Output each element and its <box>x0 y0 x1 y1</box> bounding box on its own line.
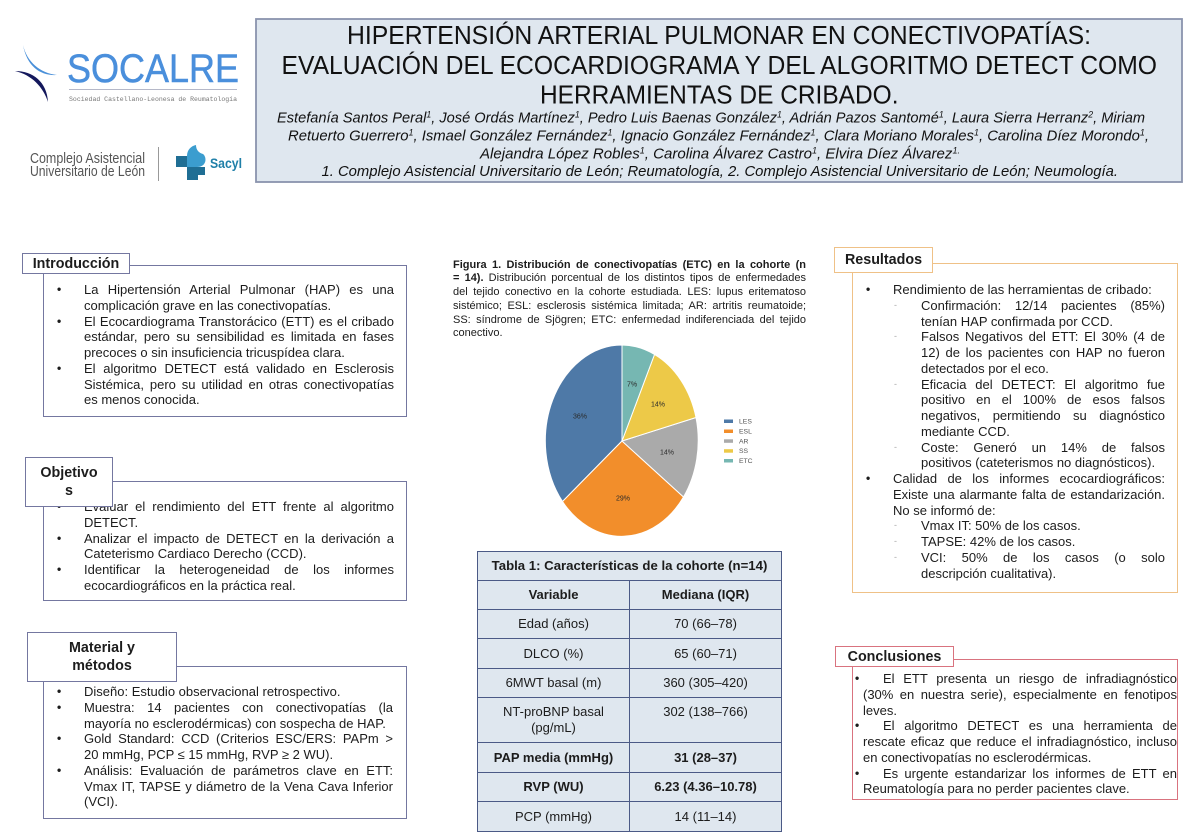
table: características de la cohorte: Mediana (IQR) <box>662 587 749 602</box>
table: características de la cohorte: 360 (305–420) <box>663 675 748 690</box>
table: características de la cohorte: NT-proBNP basal <box>503 704 604 719</box>
pie legend: SS <box>739 448 749 455</box>
logo: SOCALRE: SOCALRE <box>67 47 239 91</box>
heading: Material y métodos <box>27 632 177 682</box>
pie percentage labels: 36% <box>573 414 587 420</box>
text block: métodos bullets: 20 mmHg, PCP ≤ 15 mmHg, RVP ≥ 2 WU). <box>84 747 333 762</box>
panel: material y métodos: • <box>57 684 61 698</box>
pie chart: distribución de conectivopatías <box>546 346 753 536</box>
text block: conclusiones bullets: Es urgente estandarizar los informes de ETT en <box>883 766 1177 780</box>
logo: Complejo Asistencial / Sacyl: Complejo Asistencial <box>30 150 145 167</box>
text block: objetivos bullets: DETECT. <box>84 515 138 530</box>
logo: Complejo Asistencial / Sacyl: Universitario de León <box>30 163 145 180</box>
text block: introducción bullets: es menos conocida. <box>84 392 200 407</box>
text block: métodos bullets: Vmax IT, TAPSE y diámetro de la Vena Cava Inferior <box>84 778 393 794</box>
text block: objetivos bullets <box>57 499 394 593</box>
title banner: 2 <box>1087 109 1093 119</box>
text block: figure 1 caption: conectivo. <box>453 327 503 339</box>
text block: resultados bullets: Confirmación: 12/14 pacientes (85%) <box>921 298 1165 313</box>
panel: conclusiones: • <box>855 718 859 732</box>
panel: resultados: • <box>866 471 870 485</box>
panel: resultados: • <box>866 282 870 296</box>
text block: objetivos bullets: Evaluar el rendimiento del ETT frente al algoritmo <box>84 499 394 514</box>
title banner: 1. <box>952 146 960 156</box>
text block: resultados bullets: mediante CCD. <box>921 424 1010 439</box>
text block: resultados bullets: tenían HAP confirmada por CCD. <box>921 314 1113 328</box>
title banner: 1 <box>607 128 612 138</box>
text block: conclusiones bullets: El ETT presenta un riesgo de infradiagnóstico <box>883 671 1177 686</box>
text block: métodos bullets: mayoría no esclerodérmicas) con sospecha de HAP. <box>84 716 386 730</box>
title banner: 1 <box>409 128 413 138</box>
panel: resultados <box>834 247 1178 593</box>
table: características de la cohorte: Variable <box>529 587 578 602</box>
pie legend: LES <box>739 418 752 426</box>
title banner: , Elvira Díez Álvarez <box>817 146 953 162</box>
text block: métodos bullets: Muestra: 14 pacientes con conectivopatías (la <box>84 700 393 715</box>
text block: resultados bullets: - <box>894 300 897 310</box>
heading: Conclusiones <box>835 646 954 667</box>
title banner: Alejandra López Robles <box>480 146 639 162</box>
table: características de la cohorte: 14 (11–14) <box>675 808 736 824</box>
panel: introducción: • <box>57 314 61 328</box>
pie percentage labels: 7% <box>627 382 637 388</box>
title banner: HERRAMIENTAS DE CRIBADO. <box>540 81 898 109</box>
title banner: Retuerto Guerrero <box>288 128 410 145</box>
table: características de la cohorte: 31 (28–37) <box>674 750 737 764</box>
text block: conclusiones bullets: en conectivopatías no esclerodérmicas. <box>863 750 1091 765</box>
table: características de la cohorte: PAP media (mmHg) <box>494 750 613 764</box>
text block: resultados bullets: positivos (cateterismos no diagnósticos). <box>921 455 1155 470</box>
text block: figure 1 caption: del tejido conectivo en la cohorte estudiada. LES: lupus eritematoso <box>453 286 806 298</box>
text block: métodos bullets: Gold Standard: CCD (Criterios ESC/ERS: PAPm > <box>84 731 393 746</box>
text block: introducción bullets <box>57 282 394 407</box>
panel: conclusiones: • <box>855 766 859 780</box>
text block: resultados bullets <box>866 282 1165 580</box>
logo: SOCALRE: Sociedad Castellano-Leonesa de Reumatología <box>69 96 237 103</box>
panel: introducción: • <box>57 282 61 296</box>
title banner: , Adrián Pazos Santomé <box>782 109 939 126</box>
text block: resultados bullets: detectados por el eco. <box>921 361 1049 376</box>
text block: métodos bullets: Análisis: Evaluación de parámetros clave en ETT: <box>84 763 393 778</box>
title banner: 1. Complejo Asistencial Universitario de León; Reumatología, 2. Complejo Asistencial Universitario de León; Neumología. <box>322 163 1118 180</box>
text block: resultados bullets: No se informó de: <box>893 502 996 518</box>
heading: Introducción <box>22 253 130 274</box>
panel: material y métodos: • <box>57 700 61 714</box>
text block: figure 1 caption: SS: síndrome de Sjögren; ETC: enfermedad indiferenciada del tejido <box>453 314 806 326</box>
panel: introducción <box>22 253 407 417</box>
title banner: 1 <box>939 109 944 119</box>
text block: introducción bullets: Sistémica, pero su utilidad en otras conectivopatías <box>84 376 394 392</box>
pie legend: ESL <box>739 428 752 436</box>
text block: conclusiones bullets <box>855 671 1177 796</box>
panel: objetivos <box>25 457 407 601</box>
heading: Conclusiones: Conclusiones <box>848 648 941 664</box>
table: características de la cohorte: Edad (años) <box>518 616 589 631</box>
text block: introducción bullets: El Ecocardiograma Transtorácico (ETT) es el cribado <box>84 314 394 328</box>
title banner: , Carolina Díez Morondo <box>979 128 1140 145</box>
table: características de la cohorte: 70 (66–78) <box>674 616 737 631</box>
title banner: 1 <box>1140 128 1145 138</box>
text block: resultados bullets: Calidad de los informes ecocardiográficos: <box>893 471 1165 486</box>
title banner: , Laura Sierra Herranz <box>944 109 1089 126</box>
text block: objetivos bullets: ecocardiográficos en la práctica real. <box>84 578 296 593</box>
text block: introducción bullets: precoces o sin insuficiencia tricuspídea clara. <box>84 345 345 360</box>
title banner: , Miriam <box>1093 109 1145 126</box>
heading: Introducción: Introducción <box>33 256 119 272</box>
title banner: 1 <box>974 128 979 138</box>
header graphics <box>15 18 1183 183</box>
table: características de la cohorte: Tabla 1: Características de la cohorte (n=14) <box>492 558 767 573</box>
slice: SS 14% <box>622 354 696 441</box>
heading: Resultados: Resultados <box>845 252 922 268</box>
text block: figure 1 caption: Figura 1. Distribución de conectivopatías (ETC) en la cohorte (n <box>453 258 806 270</box>
title banner: 1 <box>426 109 431 119</box>
logo: Complejo Asistencial / Sacyl <box>30 145 242 181</box>
panel: introducción: • <box>57 361 61 375</box>
table: características de la cohorte: 6.23 (4.36–10.78) <box>654 779 757 794</box>
title banner: , Ignacio González Fernández <box>612 128 811 145</box>
slice: ESL 29% <box>562 441 684 536</box>
text block: resultados bullets: - <box>894 378 897 388</box>
title banner: , Clara Moriano Morales <box>816 128 974 145</box>
text block: métodos bullets: (VCI). <box>84 794 118 809</box>
table: características de la cohorte: RVP (WU) <box>523 779 584 794</box>
pie percentage labels <box>573 382 674 502</box>
text block: introducción bullets: El algoritmo DETECT está validado en Esclerosis <box>84 361 394 376</box>
table: características de la cohorte: 302 (138–766) <box>663 704 748 719</box>
pie legend <box>724 418 753 465</box>
text block: resultados bullets: - <box>894 520 897 530</box>
title banner: 1 <box>575 109 580 119</box>
text block: resultados bullets: VCI: 50% de los casos (o solo <box>921 550 1165 565</box>
panel: material y métodos: • <box>57 731 61 745</box>
pie percentage labels: 29% <box>616 496 630 502</box>
text block: resultados bullets: descripción cualitativa). <box>921 566 1056 580</box>
panel: objetivos: • <box>57 562 61 576</box>
slice: AR 14% <box>622 418 698 497</box>
text block: métodos bullets <box>57 684 393 809</box>
text block: objetivos bullets: Identificar la heterogeneidad de los informes <box>84 562 394 577</box>
text block: métodos bullets: Diseño: Estudio observacional retrospectivo. <box>84 684 341 699</box>
pie legend: AR <box>739 438 749 445</box>
table: características de la cohorte: PCP (mmHg) <box>515 808 592 824</box>
text block: resultados bullets: - <box>894 442 897 452</box>
text block: resultados bullets: Vmax IT: 50% de los casos. <box>921 518 1081 533</box>
title banner: , José Ordás Martínez <box>431 109 575 126</box>
text block: introducción bullets: complicación grave en las conectivopatías. <box>84 298 331 313</box>
title banner: , Carolina Álvarez Castro <box>645 146 812 162</box>
text block: introducción bullets: estándar, pero su sensibilidad es limitada en fases <box>84 329 394 344</box>
text block: objetivos bullets: Analizar el impacto de DETECT en la derivación a <box>84 530 394 546</box>
heading: Material y métodos: Material y <box>69 640 135 656</box>
heading: Material y métodos: métodos <box>72 658 132 674</box>
text block: figure 1 caption: sistémico; ESL: esclerosis sistémica limitada; AR: artritis reumatoide; <box>453 300 806 312</box>
heading: Objetivos: s <box>65 483 73 499</box>
table: características de la cohorte: 6MWT basal (m) <box>506 675 601 690</box>
title banner: Estefanía Santos Peral <box>277 109 430 126</box>
text block: resultados bullets: 12) de los pacientes con HAP no fueron <box>921 345 1165 360</box>
slice: LES 36% <box>545 345 622 502</box>
text block: resultados bullets: Existe una alarmante falta de estandarización. <box>893 487 1165 502</box>
text block: figure 1 caption <box>453 258 806 339</box>
logo: SOCALRE <box>15 45 239 103</box>
panel: objetivos: • <box>57 499 61 513</box>
text block: resultados bullets: Coste: Generó un 14% de falsos <box>921 440 1165 454</box>
text block: conclusiones bullets: (30% en nuestra serie), especialmente en fenotipos <box>863 687 1177 702</box>
panel: conclusiones <box>835 646 1178 800</box>
pie percentage labels: 14% <box>651 402 665 408</box>
text block: resultados bullets: positivo en el 100% de esos falsos <box>921 392 1165 407</box>
panel: conclusiones: • <box>855 671 859 685</box>
text block: conclusiones bullets: leves. <box>863 702 897 718</box>
text block: conclusiones bullets: rescate eficaz que reduce el infradiagnóstico, incluso <box>863 734 1177 749</box>
pie percentage labels: 14% <box>660 450 674 456</box>
pie legend: ETC <box>739 458 753 465</box>
title banner: HIPERTENSIÓN ARTERIAL PULMONAR EN CONECTIVOPATÍAS: <box>347 21 1091 50</box>
table: características de la cohorte: 65 (60–71) <box>674 646 737 660</box>
title banner: 1 <box>812 146 817 156</box>
table: características de la cohorte <box>477 551 782 832</box>
text block: conclusiones bullets: Reumatología para no perder pacientes clave. <box>863 781 1130 796</box>
panel: objetivos: • <box>57 530 61 544</box>
text block: resultados bullets: Eficacia del DETECT: El algoritmo fue <box>921 376 1165 392</box>
title banner: , <box>1145 128 1149 145</box>
text block: resultados bullets: Rendimiento de las herramientas de cribado: <box>893 282 1152 297</box>
heading: Resultados <box>834 247 933 273</box>
title banner: , Ismael González Fernández <box>413 128 608 145</box>
heading: Objetivos: Objetivo <box>40 465 98 481</box>
logo: Complejo Asistencial / Sacyl: Sacyl <box>210 155 242 171</box>
text block: conclusiones bullets: El algoritmo DETECT es una herramienta de <box>883 718 1177 733</box>
text block: objetivos bullets: Cateterismo Cardiaco Derecho (CCD). <box>84 546 307 561</box>
panel: material y métodos <box>27 632 407 819</box>
title banner: EVALUACIÓN DEL ECOCARDIOGRAMA Y DEL ALGORITMO DETECT COMO <box>282 51 1157 80</box>
text block: introducción bullets: La Hipertensión Arterial Pulmonar (HAP) es una <box>84 282 394 297</box>
title banner: , Pedro Luis Baenas González <box>580 109 778 126</box>
table: características de la cohorte: DLCO (%) <box>524 646 583 660</box>
text block: resultados bullets: negativos, permitiendo su diagnóstico <box>921 408 1165 423</box>
text block: resultados bullets: - <box>894 552 897 562</box>
panel: material y métodos: • <box>57 763 61 777</box>
text block: resultados bullets: Falsos Negativos del ETT: El 30% (4 de <box>921 329 1165 344</box>
text block: figure 1 caption: = 14). Distribución porcentual de los distintos tipos de enfermedades <box>453 272 806 284</box>
table: características de la cohorte: (pg/mL) <box>531 720 576 735</box>
text block: resultados bullets: TAPSE: 42% de los casos. <box>921 534 1075 549</box>
title banner: 1 <box>640 146 645 156</box>
title banner <box>256 19 1182 182</box>
title banner: 1 <box>777 109 782 119</box>
text block: resultados bullets: - <box>894 331 897 341</box>
text block: resultados bullets: - <box>894 536 897 546</box>
slice: ETC 7% <box>622 345 654 441</box>
title banner: 1 <box>811 128 816 138</box>
heading: Objetivos <box>25 457 113 507</box>
